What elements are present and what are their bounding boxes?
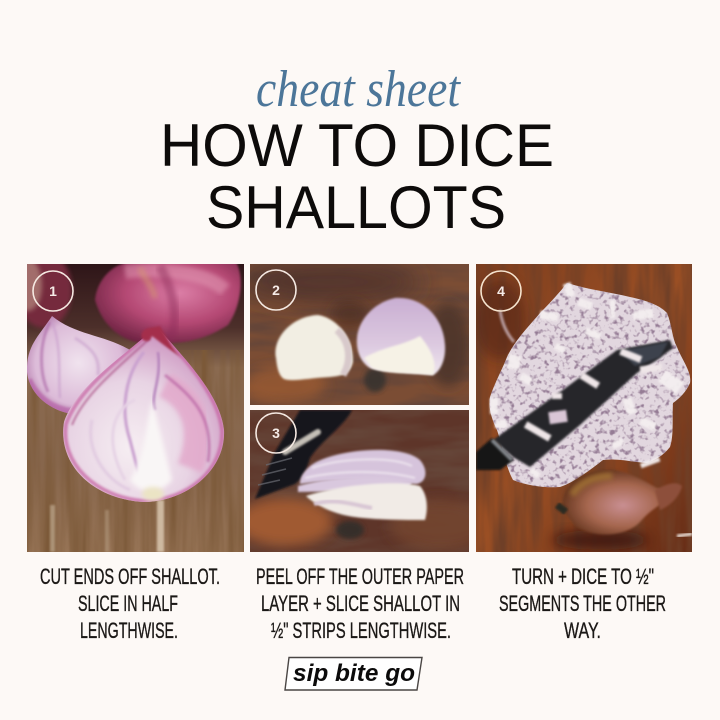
step number 4 badge <box>481 271 521 311</box>
knife <box>255 410 352 499</box>
script subtitle: cheat sheet: cheat sheet <box>256 61 461 118</box>
caption: step 4: WAY. <box>564 618 601 643</box>
caption: steps 2 and 3: LAYER + SLICE SHALLOT IN <box>261 591 460 616</box>
caption: steps 2 and 3: PEEL OFF THE OUTER PAPER <box>256 564 464 589</box>
panel: photo step 3, sliced strips with knife <box>250 410 469 552</box>
caption: step 1: CUT ENDS OFF SHALLOT. <box>40 564 220 589</box>
panel: photo step 2, peeled halves <box>240 260 470 405</box>
caption: step 4 <box>499 564 666 643</box>
heading line 1: HOW TO DICE <box>160 112 554 179</box>
panel: photo step 1, halved shallots on wood <box>14 252 244 552</box>
caption: step 4: TURN + DICE TO ½" <box>512 564 654 589</box>
caption: step 1: SLICE IN HALF <box>78 591 178 616</box>
right peeled half <box>357 298 445 375</box>
step number 2 badge: 2 <box>272 282 280 298</box>
caption: step 1 <box>40 564 220 643</box>
step number 3 badge: 3 <box>272 425 280 441</box>
caption: steps 2 and 3: ½" STRIPS LENGTHWISE. <box>271 618 451 643</box>
logo: sip bite go: sip bite go <box>293 660 415 687</box>
main halved shallot <box>63 326 224 502</box>
shallot strips <box>298 450 427 520</box>
heading line 2: SHALLOTS <box>206 174 506 241</box>
chef knife <box>476 340 673 470</box>
title block <box>160 61 554 241</box>
panel: photo step 4, diced shallot pile with knife <box>474 264 694 552</box>
step number 1 badge <box>33 271 73 311</box>
step number 3 badge <box>256 413 296 453</box>
step number 1 badge: 1 <box>49 283 57 299</box>
left peeled half <box>275 315 353 380</box>
left halved shallot <box>27 316 130 414</box>
diced pile <box>486 280 694 490</box>
caption: step 1: LENGTHWISE. <box>80 618 178 643</box>
whole shallot <box>552 470 692 550</box>
step number 2 badge <box>256 270 296 310</box>
step number 4 badge: 4 <box>497 283 505 299</box>
caption: steps 2 and 3 <box>256 564 464 643</box>
